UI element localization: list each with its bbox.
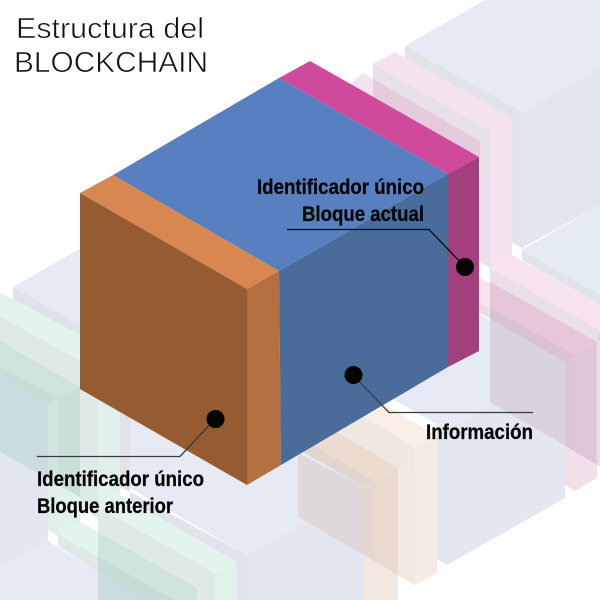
slab: peach [270,390,437,600]
right face: current id [448,157,479,367]
block: back left [0,220,300,600]
top face: data [113,78,448,271]
callout: previous block identifier: Bloque anterior [37,495,173,518]
callout: current block identifier: Identificador único [257,176,424,199]
block: upper right [405,0,600,248]
top face: unique id previous block [80,175,279,289]
callout: information [344,366,533,444]
left face: previous id [80,193,247,485]
right face: information [279,174,448,465]
title: BLOCKCHAIN [14,47,208,79]
slab: upper pink [350,52,512,268]
main block [80,61,479,485]
callout: information: Información [426,421,533,444]
block: lower right [522,205,600,305]
slab: upper green [0,293,120,536]
top face: unique id current block [279,61,479,174]
slab: lower pink [479,255,600,491]
callout: current block identifier: Bloque actual [302,203,424,226]
title [14,13,208,79]
callout: previous block identifier: Identificador único [37,468,204,491]
callout: previous block identifier [37,410,224,518]
inner face: previous id edge [247,271,281,485]
callout: current block identifier [257,176,474,276]
block: center lower [330,296,565,565]
block: under main cube [130,300,365,600]
title: Estructura del [16,13,204,45]
slab: lower green [58,482,237,600]
